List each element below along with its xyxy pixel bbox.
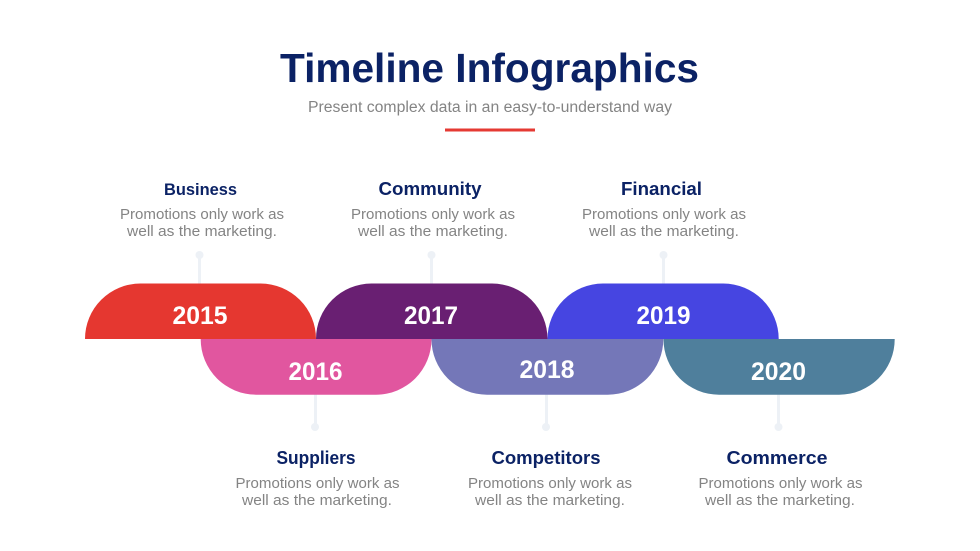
label: Community	[351, 179, 515, 240]
segment: 2017	[316, 284, 548, 339]
title accent underline	[445, 128, 535, 132]
segment: 2015	[85, 284, 316, 339]
connector: 2015	[196, 251, 204, 284]
label: Financial: Promotions only work as	[582, 207, 746, 223]
segment: 2018	[431, 339, 663, 395]
label: Suppliers	[236, 448, 400, 509]
label: Competitors: Competitors	[492, 448, 600, 468]
label: Business: Business	[164, 180, 237, 199]
label: Community: Promotions only work as	[351, 207, 515, 223]
label: Community: well as the marketing.	[357, 224, 508, 240]
segment: 2020: 2020	[751, 358, 806, 386]
subtitle: Present complex data in an easy-to-understand way	[308, 99, 672, 116]
label: Commerce: well as the marketing.	[704, 493, 855, 509]
label: Suppliers: Suppliers	[276, 448, 356, 468]
label: Business: well as the marketing.	[126, 224, 277, 240]
connector: 2020	[774, 394, 782, 431]
label: Competitors: well as the marketing.	[474, 493, 625, 509]
label: Business: Promotions only work as	[120, 207, 284, 223]
connector: 2017	[428, 251, 436, 284]
label: Competitors: Promotions only work as	[468, 476, 632, 492]
segment: 2016	[201, 339, 432, 395]
label: Business	[120, 180, 284, 240]
title: Timeline Infographics	[280, 45, 699, 91]
label: Suppliers: Promotions only work as	[236, 476, 400, 492]
label: Competitors	[468, 448, 632, 509]
label: Financial	[582, 179, 746, 240]
connector: 2019	[660, 251, 668, 284]
label: Community: Community	[378, 179, 482, 199]
label: Suppliers: well as the marketing.	[241, 493, 392, 509]
label: Commerce: Commerce	[726, 448, 828, 468]
segment: 2017: 2017	[404, 302, 458, 330]
connector: 2018	[542, 394, 550, 431]
segment: 2016: 2016	[288, 358, 342, 386]
segment: 2019	[548, 284, 779, 339]
segment: 2019: 2019	[636, 302, 690, 330]
label: Financial: Financial	[621, 179, 702, 199]
label: Commerce: Promotions only work as	[698, 476, 862, 492]
label: Financial: well as the marketing.	[588, 224, 739, 240]
segment: 2018: 2018	[520, 356, 575, 384]
label: Commerce	[698, 448, 862, 509]
segment: 2015: 2015	[172, 302, 228, 330]
connector: 2016	[311, 394, 319, 431]
segment: 2020	[663, 339, 895, 395]
